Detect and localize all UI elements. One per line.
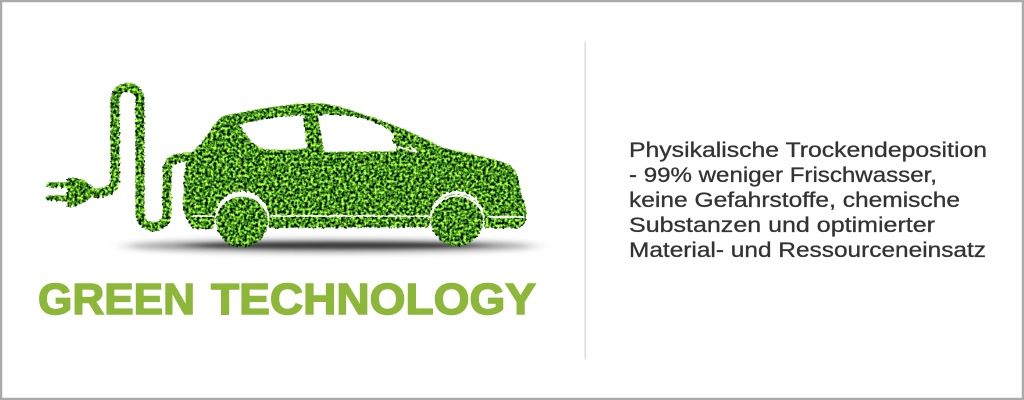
wheel: front (431, 194, 483, 246)
icon: white wheel arches and trim line (191, 146, 524, 218)
text block: description (629, 139, 987, 262)
text block: description: Substanzen und optimierter (629, 214, 935, 237)
heading: green technology: GREEN (38, 275, 195, 324)
icon: car body (183, 103, 527, 247)
text block: description: Physikalische Trockendeposition (629, 139, 987, 162)
heading: green technology (38, 275, 536, 324)
car ground shadow (125, 239, 535, 253)
heading: green technology: TECHNOLOGY (211, 275, 536, 324)
text block: description: keine Gefahrstoffe, chemische (629, 189, 960, 212)
divider (584, 42, 586, 359)
wheel: rear (216, 195, 268, 247)
text block: description: - 99% weniger Frischwasser, (629, 164, 937, 187)
text block: description: Material- und Ressourceneinsatz (629, 239, 986, 262)
panel: green car illustration (49, 87, 535, 253)
icon: charging cable and plug (49, 87, 190, 226)
